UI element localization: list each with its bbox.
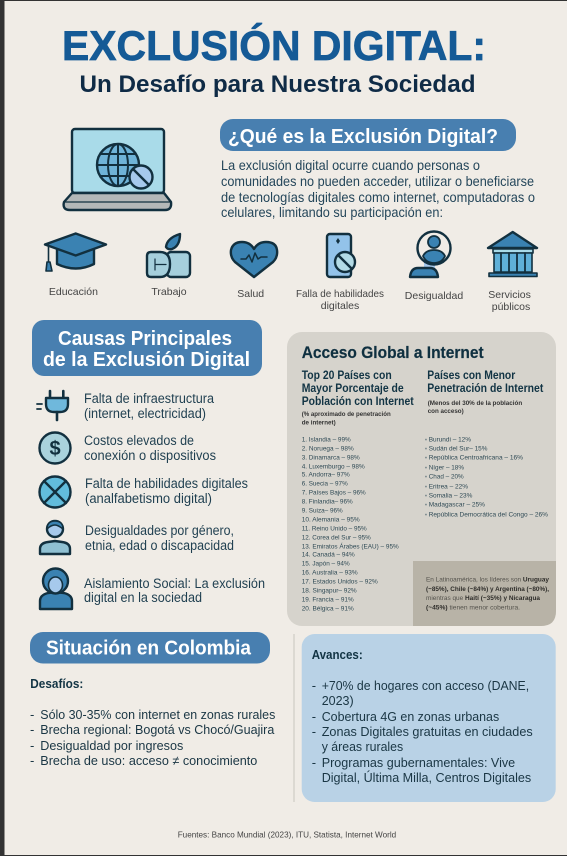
cause: costos: conexión o dispositivos — [84, 448, 216, 463]
cause: habilidades — [85, 476, 248, 506]
list: top 20 países: 14. Canadá – 94% — [302, 551, 355, 558]
callout: Latinoamérica: (~85%), Chile (~84%) y Argentina (~80%), — [426, 586, 549, 593]
list: top 20 países: 5. Andorra– 97% — [302, 472, 350, 479]
cause: habilidades: Falta de habilidades digitales — [85, 476, 248, 491]
list: top 20 países: 4. Luxemburgo – 98% — [302, 463, 365, 470]
label: Educación: Educación — [49, 286, 98, 298]
definition text: La exclusión digital ocurre cuando personas o — [221, 157, 480, 173]
note: menor penetración — [428, 400, 522, 415]
subheading: menor penetración: Países con Menor — [427, 370, 516, 382]
subheading: top 20: Top 20 Países con — [302, 370, 392, 382]
list: top 20 países: 10. Alemania – 95% — [302, 517, 360, 524]
icon: laptop with blocked globe — [64, 129, 171, 210]
list: países con menor penetración: Chad – 20% — [429, 473, 464, 480]
list: top 20 países: 20. Bélgica – 91% — [302, 605, 354, 612]
panel: avances: - — [312, 724, 316, 739]
list: top 20 países: 17. Estados Unidos – 92% — [302, 578, 378, 585]
label: Servicios públicos: Servicios — [488, 289, 531, 301]
cause: costos — [84, 433, 216, 463]
text block: desafíos: Brecha regional: Bogotá vs Chocó/Guajira — [40, 722, 275, 737]
cause: infraestructura: Falta de infraestructura — [84, 391, 214, 406]
cause: aislamiento — [84, 576, 265, 605]
panel: avances: - — [312, 678, 316, 693]
label: Falla de habilidades digitales: digitales — [321, 300, 359, 312]
list: top 20 países: 7. Países Bajos – 96% — [302, 490, 366, 497]
callout: Latinoamérica — [426, 577, 549, 611]
definition text: celulares, limitando su participación en: — [221, 204, 443, 220]
list: top 20 países: 19. Francia – 91% — [302, 596, 354, 603]
list: top 20 países: 13. Emiratos Árabes (EAU) – 95% — [302, 541, 399, 550]
icon: dollar coin: $ — [49, 438, 61, 460]
icon: heart — [231, 242, 277, 277]
definition text — [221, 157, 535, 220]
definition text: de tecnologías digitales como internet, computadoras o — [221, 189, 535, 205]
cause: desigualdades: Desigualdades por género, — [85, 523, 234, 538]
list: países con menor penetración: Burundi – 12% — [429, 436, 471, 443]
icon: cross circle — [40, 476, 70, 508]
callout box background — [413, 561, 556, 626]
panel: acceso global a internet — [287, 332, 556, 626]
list: top 20 países: 3. Dinamarca – 98% — [302, 454, 360, 461]
icon: dollar coin — [40, 432, 70, 464]
heading: Causas Principales: Causas Principales — [58, 328, 232, 350]
panel: avances: - — [312, 755, 316, 770]
list: top 20 países: 9. Suiza– 96% — [302, 508, 343, 515]
panel: avances: - — [312, 709, 316, 724]
footer: fuentes: Fuentes: Banco Mundial (2023), ITU, Statista, Internet World — [178, 829, 396, 839]
label: Servicios públicos — [488, 289, 531, 313]
text block: desafíos: Brecha de uso: acceso ≠ conocimiento — [40, 753, 257, 768]
icon: public building — [488, 232, 537, 276]
panel: avances: +70% de hogares con acceso (DANE, — [322, 678, 529, 693]
list: top 20 países: 11. Reino Unido – 95% — [302, 525, 367, 532]
cause: habilidades: (analfabetismo digital) — [85, 491, 212, 506]
panel: avances: y áreas rurales — [322, 739, 404, 754]
list: países con menor penetración: Eritrea – 22% — [429, 483, 468, 490]
cause: desigualdades — [85, 523, 234, 553]
heading: Causas Principales: de la Exclusión Digital — [43, 349, 250, 371]
title: EXCLUSIÓN DIGITAL: — [62, 21, 486, 69]
note: top 20: de internet) — [302, 420, 336, 426]
panel: avances: Programas gubernamentales: Vive — [322, 755, 515, 770]
icon: person — [40, 521, 70, 554]
cause: infraestructura — [84, 391, 214, 421]
text block: desafíos: - — [30, 738, 34, 753]
list: top 20 países: 15. Japón – 94% — [302, 560, 350, 567]
note: top 20 — [302, 411, 391, 426]
callout: Latinoamérica: mientras que Haití (~35%) y Nicaragua — [426, 595, 540, 602]
label: Trabajo: Trabajo — [151, 286, 187, 298]
icon: isolated person — [40, 568, 72, 609]
subheading: top 20: Mayor Porcentaje de — [302, 383, 404, 395]
icon: phone blocked — [327, 234, 355, 277]
heading: ¿Qué es la Exclusión Digital?: ¿Qué es la Exclusión Digital? — [228, 126, 498, 148]
label: Salud: Salud — [237, 288, 264, 300]
panel: avances: Avances: — [312, 647, 363, 662]
title — [62, 21, 486, 98]
text block: desafíos: Desigualdad por ingresos — [40, 738, 184, 753]
icon: work — [147, 234, 190, 277]
callout: Latinoamérica: (~45%) tienen menor cobertura. — [426, 604, 520, 611]
text block: desafíos: - — [30, 707, 34, 722]
icon: plug — [37, 391, 68, 420]
title: Un Desafío para Nuestra Sociedad — [80, 71, 476, 98]
heading: Situación en Colombia: Situación en Colombia — [46, 638, 252, 660]
text block: desafíos: Sólo 30-35% con internet en zonas rurales — [40, 707, 276, 722]
cause: infraestructura: (internet, electricidad) — [84, 406, 206, 421]
label: Falla de habilidades digitales: Falla de habilidades — [296, 288, 384, 300]
list: top 20 países: 16. Australia – 93% — [302, 569, 358, 576]
list: países con menor penetración: Somalia – 23% — [429, 492, 472, 499]
list: países con menor penetración: República Centroafricana – 16% — [429, 454, 523, 461]
subheading: menor penetración: Penetración de Internet — [427, 383, 543, 395]
text block: desafíos: - — [30, 722, 34, 737]
subheading: menor penetración — [427, 370, 543, 395]
list: países con menor penetración: Madagascar – 25% — [429, 501, 485, 508]
cause: costos: Costos elevados de — [84, 433, 194, 448]
list: top 20 países: 1. Islandia – 99% — [302, 436, 351, 443]
heading: Situación en Colombia — [30, 632, 270, 664]
label: Desigualdad: Desigualdad — [405, 290, 463, 302]
list: países con menor penetración: Níger – 18% — [429, 464, 464, 471]
list: top 20 países — [302, 436, 399, 612]
list: top 20 países: 12. Corea del Sur – 95% — [302, 534, 371, 541]
list: top 20 países: 2. Noruega – 98% — [302, 446, 354, 453]
text block: desafíos: - — [30, 753, 34, 768]
note: menor penetración: con acceso) — [428, 408, 464, 415]
cause: desigualdades: etnia, edad o discapacidad — [85, 538, 234, 553]
list: top 20 países: 6. Suecia – 97% — [302, 480, 348, 487]
label: Falla de habilidades digitales — [296, 288, 384, 312]
list: países con menor penetración: República Democrática del Congo – 26% — [429, 511, 548, 518]
heading: ¿Qué es la Exclusión Digital? — [220, 119, 516, 151]
text block: desafíos: Desafíos: — [30, 676, 83, 691]
icon: graduation cap — [45, 234, 106, 271]
definition text: comunidades no pueden acceder, utilizar o beneficiarse — [221, 173, 534, 189]
note: top 20: (% aproximado de penetración — [302, 411, 391, 418]
heading: Causas Principales — [32, 320, 262, 376]
label: Servicios públicos: públicos — [492, 301, 530, 313]
list: top 20 países: 18. Singapur– 92% — [302, 587, 357, 594]
list: top 20 países: 8. Finlandia– 96% — [302, 499, 353, 506]
subheading: top 20 — [302, 370, 414, 408]
list: países con menor penetración — [425, 436, 548, 518]
subheading: top 20: Población con Internet — [302, 396, 414, 408]
cause: aislamiento: digital en la sociedad — [84, 590, 202, 605]
panel: avances: Zonas Digitales gratuitas en ciudades — [322, 724, 533, 739]
panel: avances: Cobertura 4G en zonas urbanas — [322, 709, 500, 724]
list: países con menor penetración: Sudán del Sur– 15% — [429, 445, 487, 452]
panel: avances: 2023) — [322, 693, 354, 708]
panel: avances: Digital, Última Milla, Centros Digitales — [322, 770, 532, 785]
callout: Latinoamérica: En Latinoamérica, los líderes son Uruguay — [426, 577, 549, 584]
panel heading: Acceso Global a Internet — [302, 343, 484, 362]
icon: inequality person — [410, 232, 450, 277]
panel: avances — [302, 634, 556, 802]
cause: aislamiento: Aislamiento Social: La exclusión — [84, 576, 265, 591]
text block: desafíos — [30, 676, 276, 768]
note: menor penetración: (Menos del 30% de la población — [428, 400, 522, 407]
